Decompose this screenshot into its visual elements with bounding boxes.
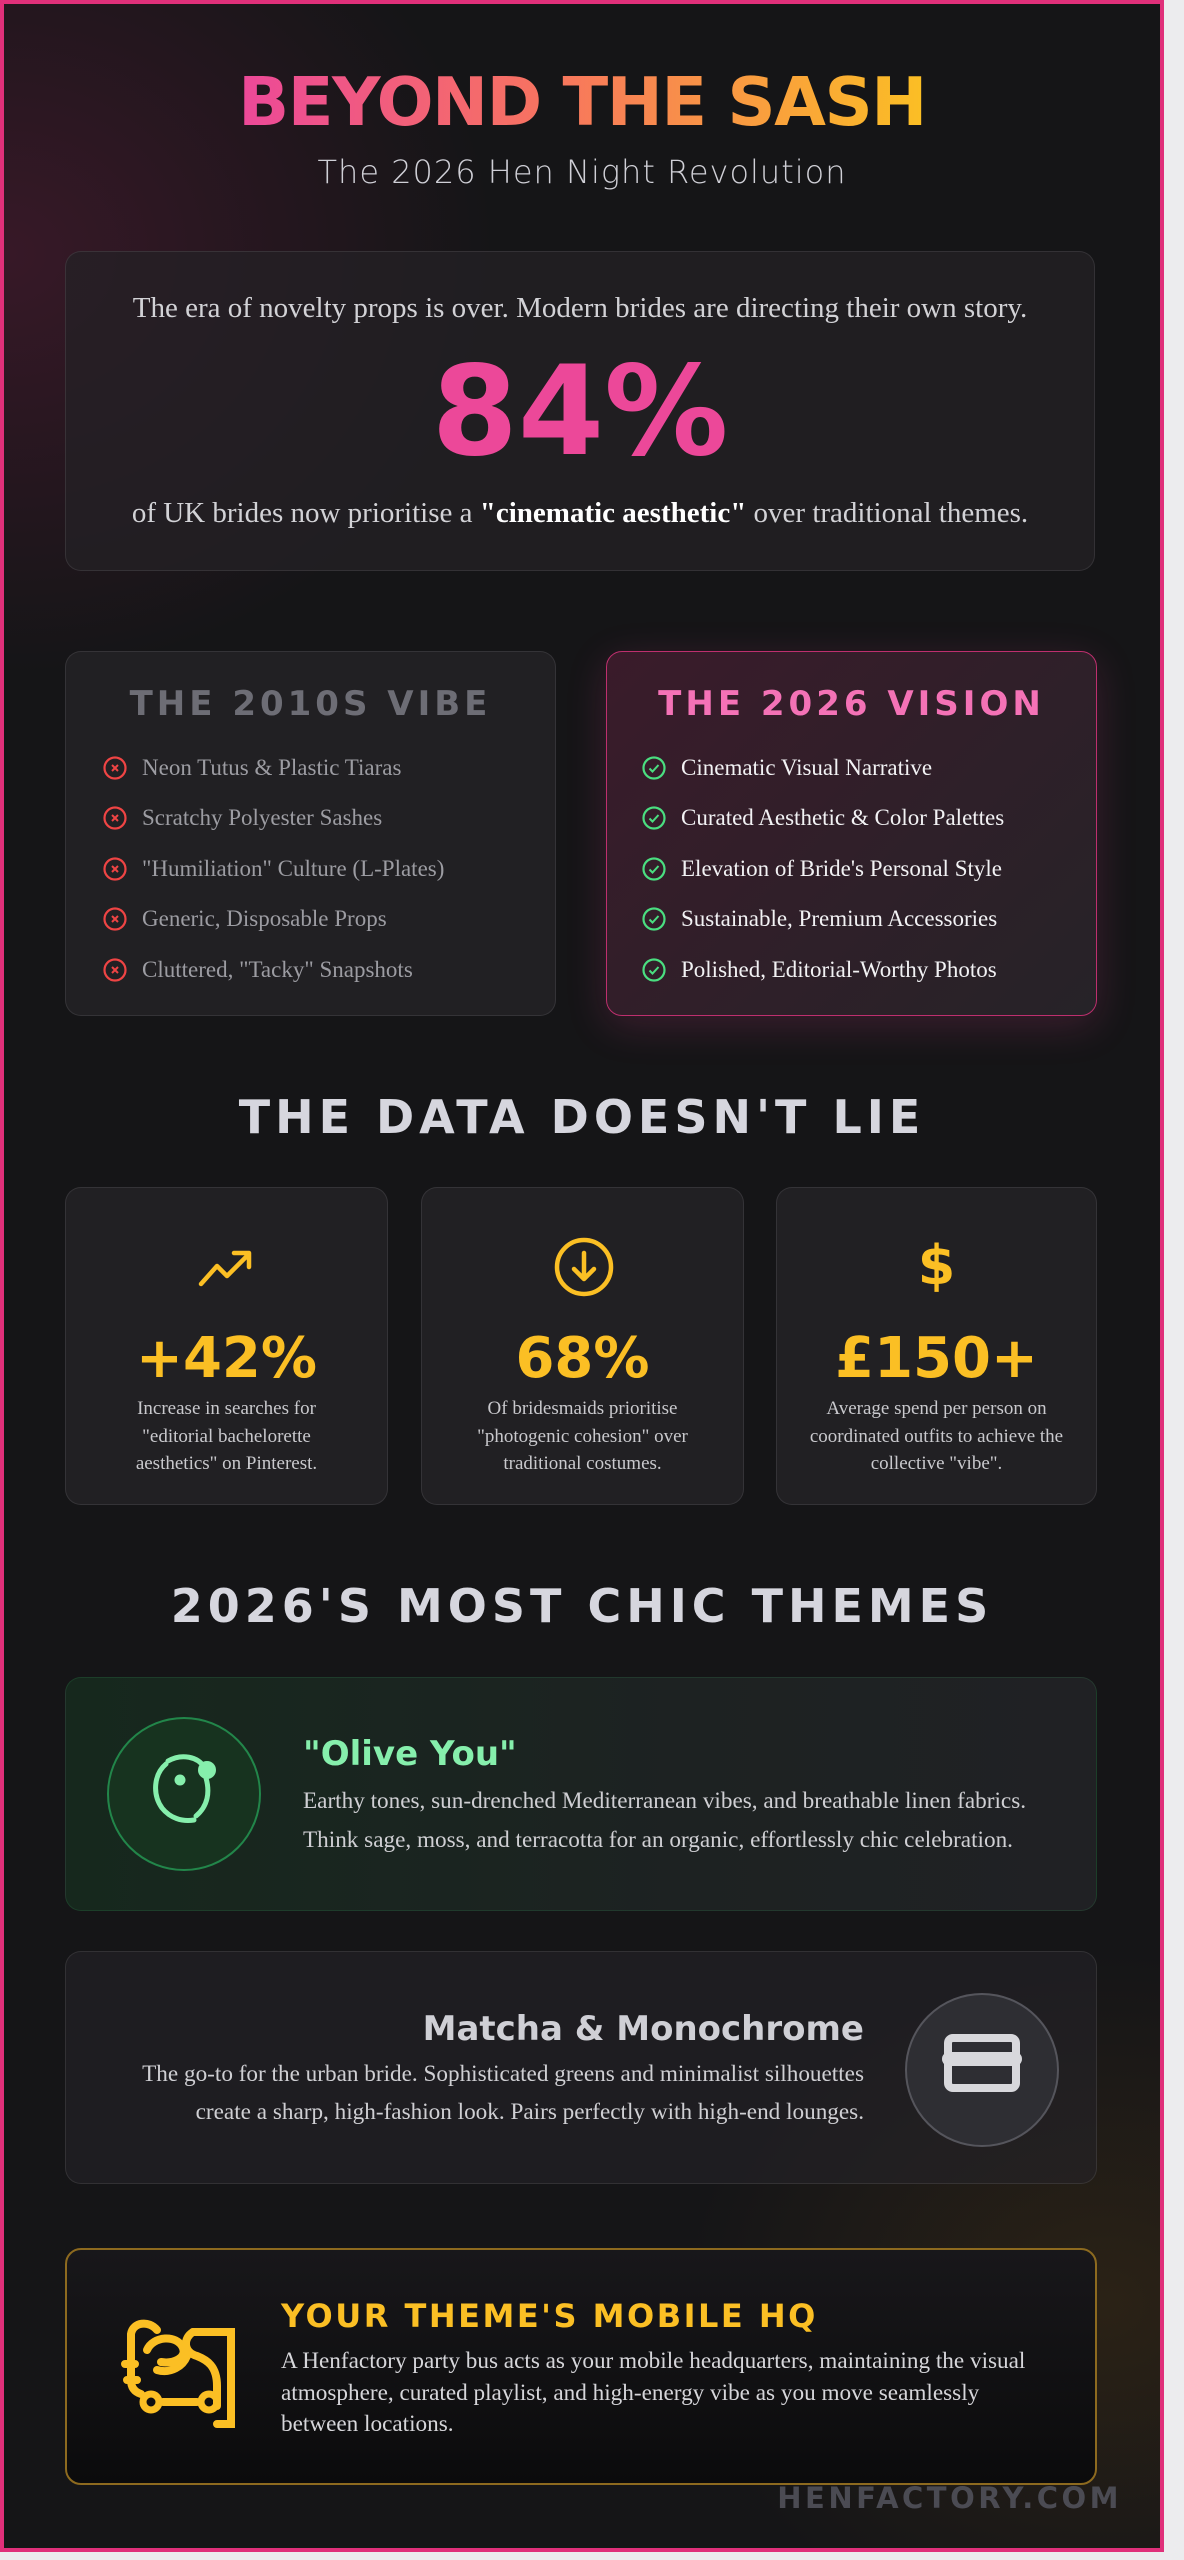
theme title: Matcha & Monochrome bbox=[423, 2009, 864, 2049]
heading: most chic themes: 2026'S MOST CHIC THEMES bbox=[171, 1579, 993, 1633]
list: new items: Curated Aesthetic & Color Palettes bbox=[681, 805, 1004, 830]
list: old items: Neon Tutus & Plastic Tiaras bbox=[142, 755, 401, 780]
big number 84%: 84% bbox=[432, 340, 728, 484]
list: new items: Elevation of Bride's Personal Style bbox=[681, 856, 1002, 881]
panel: 2010s vibe bbox=[65, 651, 556, 1016]
hero stat card bbox=[65, 251, 1095, 571]
heading: 2026: THE 2026 VISION bbox=[658, 684, 1045, 724]
icon: party bus bbox=[121, 2320, 235, 2428]
list: new items: Polished, Editorial-Worthy Photos bbox=[681, 957, 997, 982]
stat card: searches bbox=[65, 1187, 388, 1505]
list: old items: "Humiliation" Culture (L-Plates) bbox=[142, 856, 444, 881]
desc: Increase in searches for "editorial bachelorette aesthetics" on Pinterest. bbox=[136, 1398, 317, 1474]
callout: mobile HQ bbox=[65, 2248, 1097, 2485]
list: old items: Scratchy Polyester Sashes bbox=[142, 805, 382, 830]
icon: trending up bbox=[198, 1250, 252, 1286]
intro text: The era of novelty props is over. Modern brides are directing their own story. bbox=[133, 292, 1027, 324]
list: old items: Cluttered, "Tacky" Snapshots bbox=[142, 957, 413, 982]
theme card: olive you bbox=[65, 1677, 1097, 1911]
title: BEYOND THE SASH bbox=[238, 63, 926, 141]
panel: 2026 vision bbox=[606, 651, 1097, 1016]
stat card: bridesmaids bbox=[421, 1187, 744, 1505]
subtitle: The 2026 Hen Night Revolution bbox=[318, 153, 846, 191]
stat 68%: 68% bbox=[515, 1326, 650, 1391]
list: new items: Cinematic Visual Narrative bbox=[681, 755, 932, 780]
heading: 2010s: THE 2010S VIBE bbox=[130, 684, 491, 724]
icon: olive bbox=[107, 1717, 261, 1871]
callout title: YOUR THEME'S MOBILE HQ bbox=[281, 2297, 818, 2335]
callout text: A Henfactory party bus acts as your mobile headquarters, maintaining the visual atmosphere, curated playlist, and high-energy vibe as you move seamlessly between locations. bbox=[281, 2348, 1025, 2437]
theme card: matcha & monochrome bbox=[65, 1951, 1097, 2184]
footer brand: HENFACTORY.COM bbox=[777, 2481, 1122, 2515]
list: new items: Sustainable, Premium Accessories bbox=[681, 906, 997, 931]
theme desc: The go-to for the urban bride. Sophisticated greens and minimalist silhouettes create a sharp, high-fashion look. Pairs perfectly with high-end lounges. bbox=[142, 2061, 864, 2125]
stat +42%: +42% bbox=[136, 1326, 317, 1391]
stat £150+: £150+ bbox=[835, 1326, 1038, 1391]
list: old items: Generic, Disposable Props bbox=[142, 906, 387, 931]
icon: arrow down circle bbox=[554, 1238, 614, 1296]
icon: armchair bbox=[905, 1993, 1059, 2147]
desc: Of bridesmaids prioritise "photogenic cohesion" over traditional costumes. bbox=[477, 1398, 688, 1474]
heading: the data doesn't lie: THE DATA DOESN'T LIE bbox=[239, 1090, 925, 1144]
stat caption: of UK brides now prioritise a "cinematic aesthetic" over traditional themes. bbox=[132, 497, 1028, 529]
list: old items bbox=[103, 755, 444, 982]
desc: Average spend per person on coordinated outfits to achieve the collective "vibe". bbox=[810, 1398, 1063, 1474]
theme desc: Earthy tones, sun-drenched Mediterranean vibes, and breathable linen fabrics. Think sage, moss, and terracotta for an organic, effortlessly chic celebration. bbox=[303, 1788, 1026, 1852]
stat card: spend bbox=[776, 1187, 1097, 1505]
list: new items bbox=[642, 755, 1004, 982]
icon: dollar: $ bbox=[918, 1234, 955, 1297]
theme title: "Olive You" bbox=[303, 1734, 517, 1774]
